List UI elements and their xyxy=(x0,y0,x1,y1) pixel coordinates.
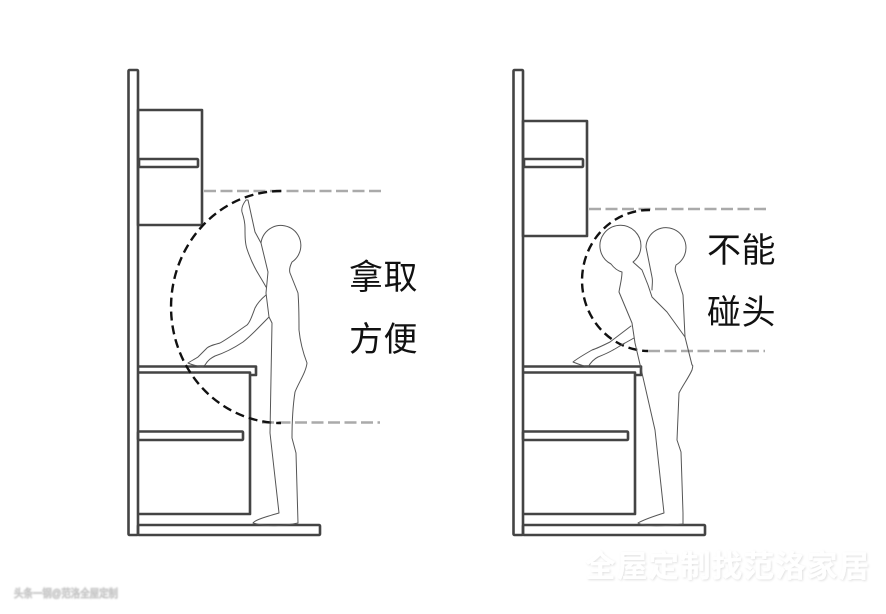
upper head guide line xyxy=(589,208,770,210)
human figure leaning forward xyxy=(573,225,693,526)
panel: must not hit head xyxy=(514,70,776,535)
watermark: source credit: 头条一钢@范洛全屋定制 xyxy=(14,586,118,600)
reach arc xyxy=(171,191,281,423)
label: must not hit head: 碰头 xyxy=(707,294,776,332)
head clearance arc xyxy=(582,210,650,351)
label: must not hit head: 不能 xyxy=(707,232,776,270)
label: easy to reach xyxy=(349,259,418,359)
label: easy to reach: 拿取 xyxy=(349,259,418,297)
cabinet structure: left xyxy=(128,70,320,535)
human figure reaching xyxy=(188,200,307,526)
lower reach guide line xyxy=(262,421,380,424)
lower head guide line xyxy=(648,350,765,352)
label: easy to reach: 方便 xyxy=(349,321,418,359)
label: must not hit head xyxy=(707,232,776,332)
panel: reach is convenient xyxy=(128,70,418,535)
cabinet structure: right xyxy=(514,70,705,535)
watermark: brand name: 全屋定制找范洛家居 xyxy=(585,550,870,584)
upper reach guide line xyxy=(204,190,384,192)
